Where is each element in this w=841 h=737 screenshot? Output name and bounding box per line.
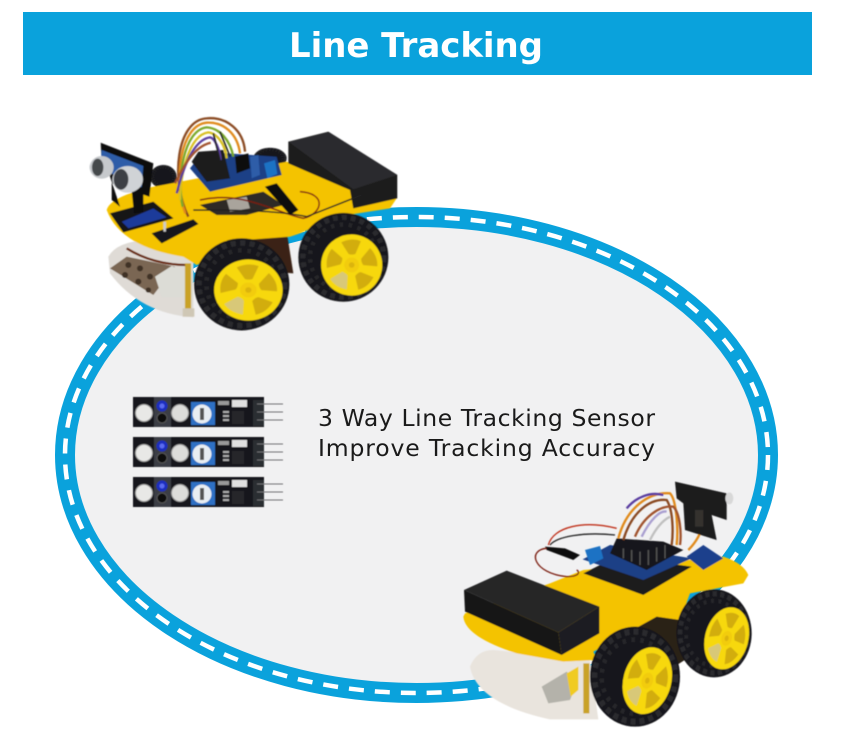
description text [318, 404, 655, 462]
track ellipse [65, 217, 768, 693]
header banner [23, 12, 812, 75]
line tracking sensor 1 [133, 397, 283, 427]
description text: Improve Tracking Accuracy [318, 434, 655, 462]
line tracking sensor 3 [133, 477, 283, 507]
robot car bottom-right [463, 482, 756, 727]
description text: 3 Way Line Tracking Sensor [318, 404, 655, 432]
line tracking sensor 2 [133, 437, 283, 467]
sensor modules [133, 397, 283, 507]
title: Line Tracking [289, 26, 543, 66]
robot car top-left [90, 118, 397, 330]
